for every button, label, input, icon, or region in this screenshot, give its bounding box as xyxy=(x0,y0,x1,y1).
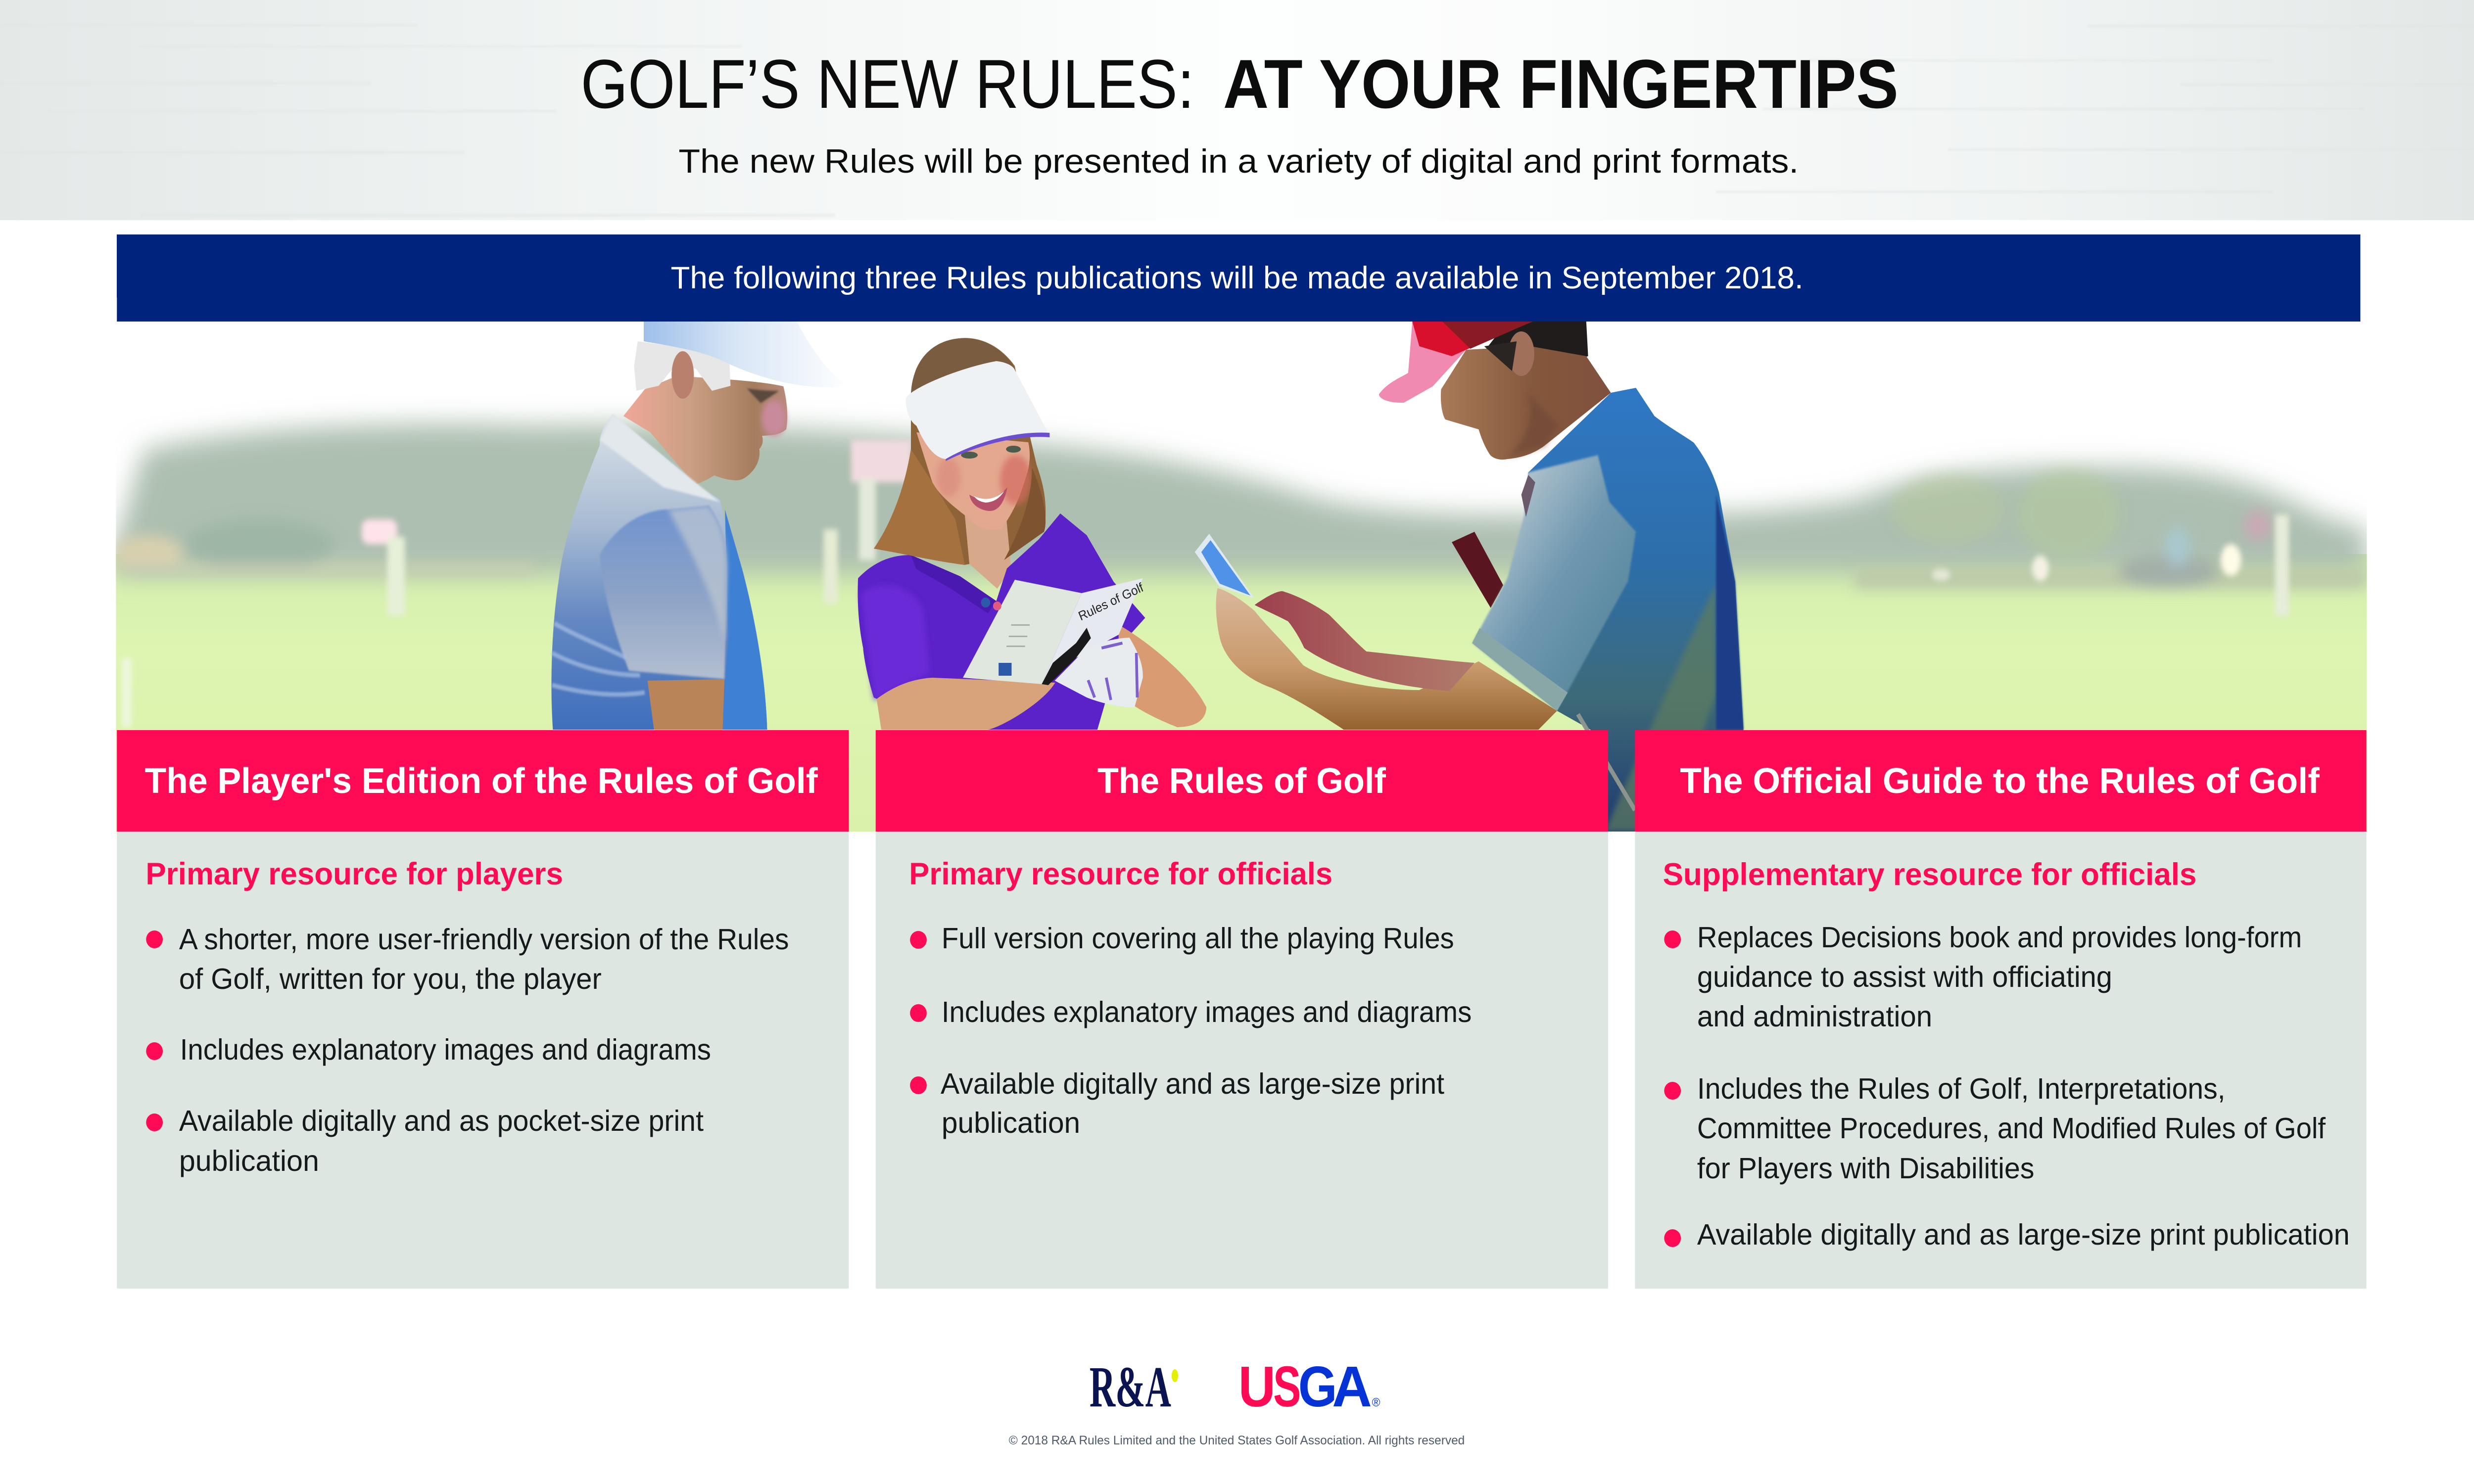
bullet 3 xyxy=(146,1105,704,1177)
panel background xyxy=(876,832,1608,1289)
shirt folds xyxy=(552,623,645,695)
header band xyxy=(0,0,2474,220)
logo: R&A: R&A xyxy=(1090,1354,1171,1419)
flags and poles xyxy=(122,440,2289,727)
bullet 1 xyxy=(146,923,789,995)
phone xyxy=(1195,534,1254,598)
logo: USGA: U xyxy=(1238,1354,1276,1419)
neck and face xyxy=(623,376,787,485)
left warm and bushes xyxy=(114,470,2367,589)
face and neck xyxy=(1441,346,1611,460)
club shaft xyxy=(1578,714,1635,810)
bullet 2: for Players with Disabilities xyxy=(1697,1152,2034,1185)
forearm xyxy=(648,679,724,730)
hair xyxy=(1484,322,1588,369)
bullet 2: Includes explanatory images and diagrams xyxy=(942,996,1472,1028)
bullet 2 xyxy=(1664,1072,2326,1185)
shirt xyxy=(1528,388,1744,832)
panel heading xyxy=(1635,730,2367,832)
shirt xyxy=(551,414,767,730)
ear xyxy=(671,351,694,399)
panel background xyxy=(1635,832,2367,1289)
bullet 1: guidance to assist with officiating xyxy=(1697,961,2112,993)
bullet 3 xyxy=(910,1067,1444,1139)
arm and lower hand xyxy=(1216,588,1557,730)
panel: Player's Edition xyxy=(117,730,849,1289)
logo: USGA: G xyxy=(1298,1354,1337,1419)
hair xyxy=(634,341,730,391)
subheading: Supplementary resource for officials xyxy=(1663,857,2196,891)
hair side over shoulder xyxy=(1004,467,1046,560)
panel: The Rules of Golf xyxy=(876,730,1608,1289)
panel heading xyxy=(117,730,849,832)
logo: USGA: S xyxy=(1273,1354,1301,1419)
illustration: older golfer in blue shirt and white cap xyxy=(551,322,845,730)
panel: Official Guide xyxy=(1635,730,2367,1289)
illustration: woman with visor reading booklet xyxy=(858,338,1206,730)
right arm xyxy=(1118,625,1206,727)
bullet 3: Available digitally and as pocket-size print xyxy=(179,1105,704,1137)
bullet 3: publication xyxy=(942,1107,1080,1139)
bullet 1: Full version covering all the playing Rules xyxy=(942,922,1454,955)
illustration: man with red cap using phone xyxy=(1195,322,1744,832)
panel heading: The Player's Edition of the Rules of Golf xyxy=(144,761,818,800)
upper hand and forearm xyxy=(1255,591,1475,691)
glove xyxy=(1055,638,1143,707)
grass xyxy=(116,554,2367,832)
collar xyxy=(600,414,720,502)
panel heading xyxy=(876,730,1608,832)
bullet 1 xyxy=(1664,921,2302,1033)
bullet 1: A shorter, more user-friendly version of the Rules xyxy=(179,923,789,956)
subheading: Primary resource for players xyxy=(145,856,563,891)
sleeve xyxy=(600,506,727,679)
bullet 3: Available digitally and as large-size print xyxy=(941,1067,1444,1100)
club grip xyxy=(1452,532,1503,608)
title xyxy=(581,45,1899,123)
tree line xyxy=(116,424,2367,574)
bullet 3: publication xyxy=(179,1145,319,1177)
face xyxy=(916,432,1030,530)
booklet: Rules of Golf xyxy=(1076,580,1146,624)
bullet 1: Replaces Decisions book and provides long-form xyxy=(1697,921,2302,954)
title: GOLF’S NEW RULES: xyxy=(581,45,1194,123)
cap xyxy=(1379,322,1532,403)
bullet 2: Includes explanatory images and diagrams xyxy=(180,1033,711,1066)
bullet 1: of Golf, written for you, the player xyxy=(179,963,602,995)
booklet xyxy=(963,578,1146,685)
panel heading: The Official Guide to the Rules of Golf xyxy=(1680,761,2320,800)
subheading: Primary resource for officials xyxy=(909,856,1332,891)
logo: USGA: A xyxy=(1332,1354,1372,1419)
hair back xyxy=(874,338,1046,565)
visor xyxy=(906,361,1049,459)
panel heading: The Rules of Golf xyxy=(1097,761,1386,800)
bullet 2: Includes the Rules of Golf, Interpretations, xyxy=(1697,1072,2226,1105)
copyright: © 2018 R&A Rules Limited and the United States Golf Association. All rights reserved xyxy=(1009,1434,1465,1447)
logo: USGA xyxy=(1238,1354,1380,1419)
bullet 2: Committee Procedures, and Modified Rules of Golf xyxy=(1697,1112,2326,1145)
beard shading xyxy=(1507,391,1559,458)
left forearm xyxy=(877,678,1055,730)
subtitle: The new Rules will be presented in a variety of digital and print formats. xyxy=(678,142,1799,180)
announcement bar xyxy=(117,234,2360,322)
announcement bar: The following three Rules publications will be made available in September 2018. xyxy=(670,260,1804,295)
sleeve xyxy=(1472,455,1636,711)
purple shirt xyxy=(858,513,1145,730)
cap xyxy=(644,322,845,387)
collar xyxy=(911,555,996,613)
bullet 3: Available digitally and as large-size print publication xyxy=(1697,1218,2350,1251)
panel background xyxy=(117,832,849,1289)
logo: USGA: ® xyxy=(1372,1395,1380,1409)
title: AT YOUR FINGERTIPS xyxy=(1223,45,1899,123)
bullet 1: and administration xyxy=(1697,1000,1932,1033)
neck xyxy=(965,514,1011,589)
illustration: golf course background xyxy=(114,424,2367,832)
